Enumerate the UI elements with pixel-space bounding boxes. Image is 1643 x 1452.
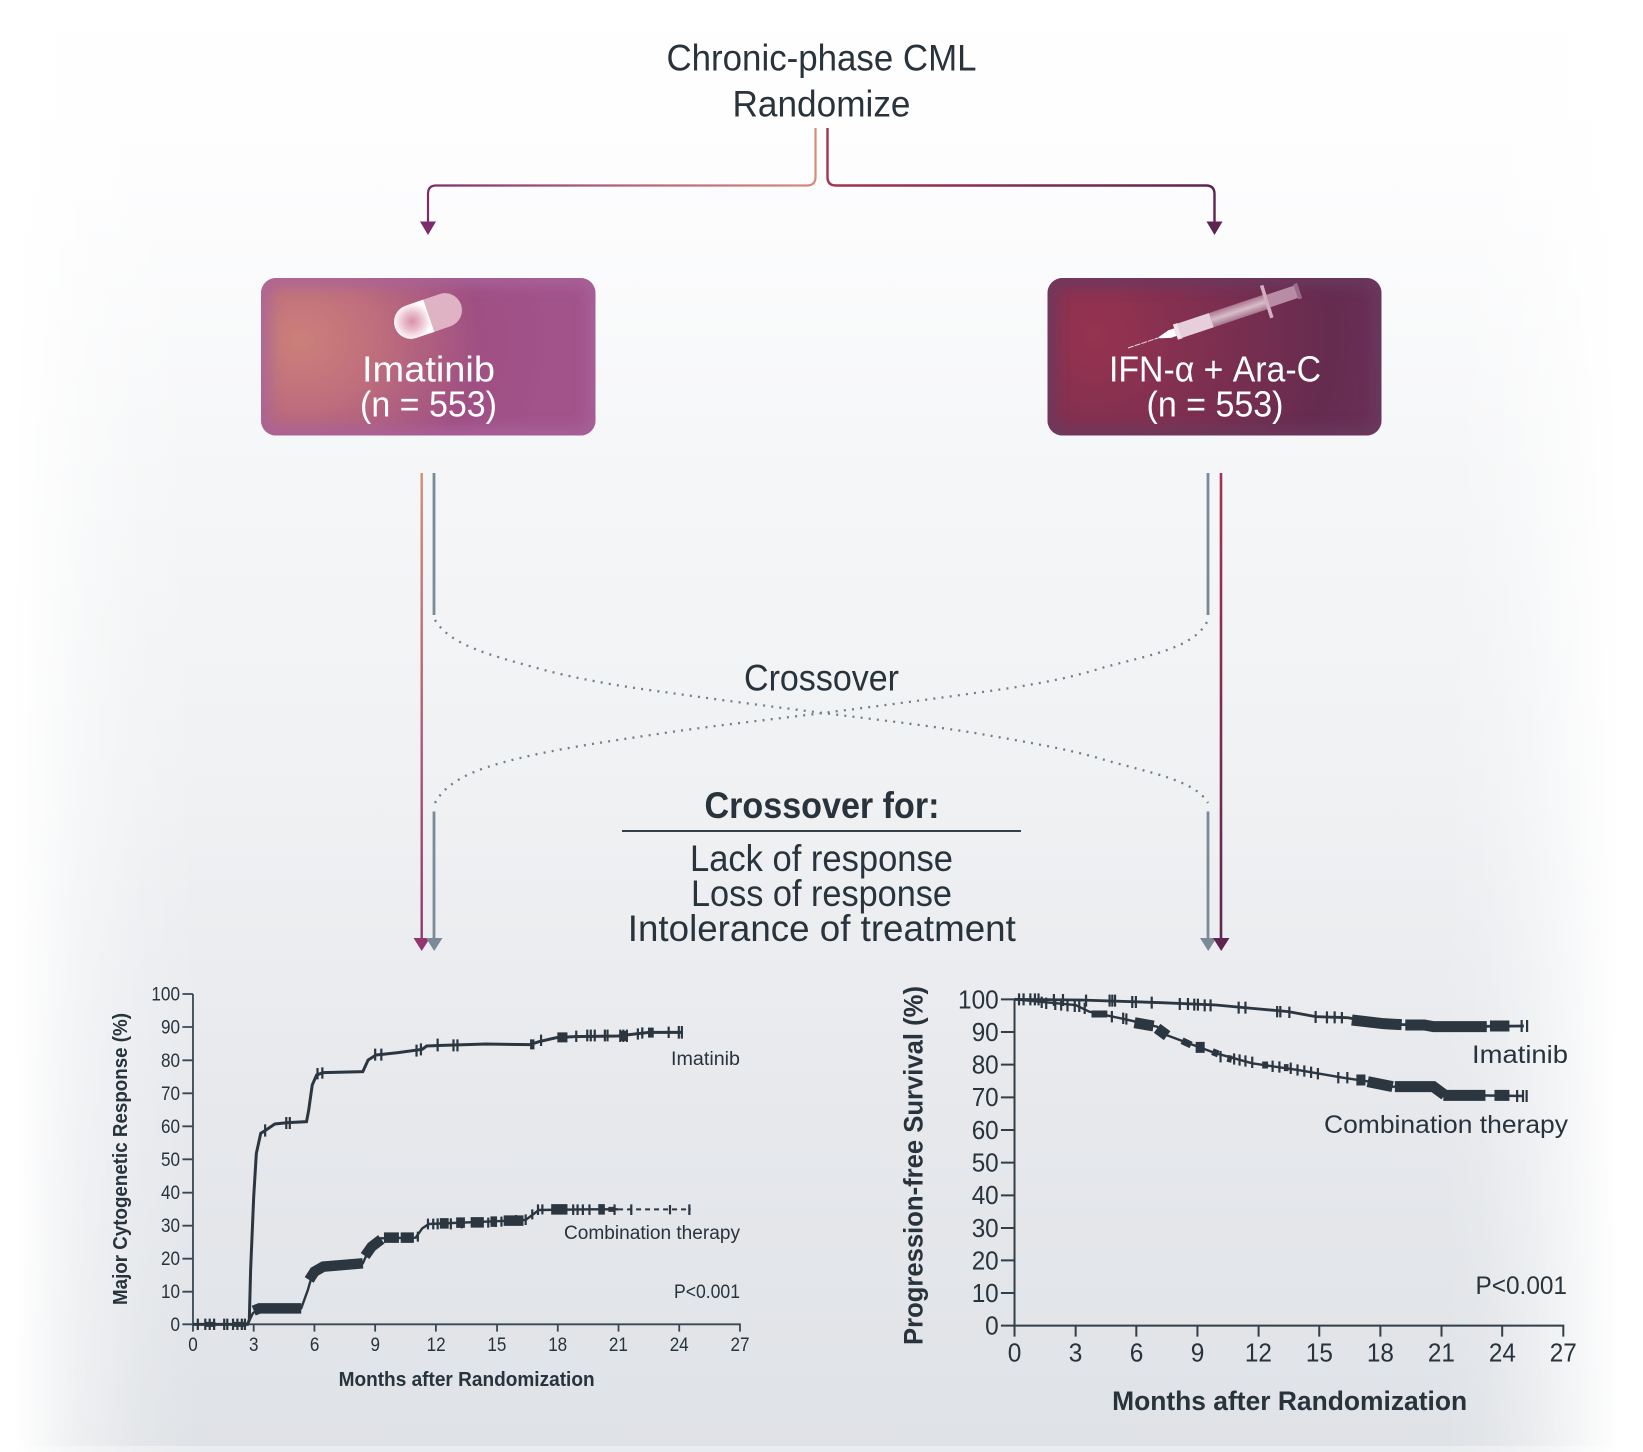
combination curve bbox=[1015, 997, 1527, 1102]
x axis labels: 3 bbox=[1069, 1338, 1082, 1368]
arrow: combination crossover line bbox=[1200, 473, 1216, 951]
y axis labels: 80 bbox=[972, 1050, 999, 1080]
x axis labels: 9 bbox=[1191, 1338, 1204, 1368]
label: imatinib: Imatinib bbox=[362, 349, 495, 390]
y axis labels: 80 bbox=[161, 1051, 180, 1072]
x axis labels: 12 bbox=[1245, 1338, 1272, 1368]
icon: capsule bbox=[389, 289, 467, 343]
label: IFN + Ara-C bbox=[1109, 349, 1321, 425]
label: IFN + Ara-C: (n = 553) bbox=[1146, 384, 1284, 425]
plot bbox=[182, 994, 740, 1332]
panel: IFN + Ara-C bbox=[1048, 274, 1382, 436]
label: imatinib bbox=[360, 349, 497, 425]
x axis labels: 27 bbox=[730, 1335, 750, 1356]
x axis labels: 15 bbox=[1306, 1338, 1333, 1368]
y axis labels: 30 bbox=[972, 1213, 999, 1243]
y axis labels: 40 bbox=[161, 1183, 180, 1204]
x axis labels: 21 bbox=[1428, 1338, 1455, 1368]
label: imatinib: Imatinib bbox=[671, 1049, 740, 1070]
y axis labels: 70 bbox=[972, 1082, 999, 1112]
plot bbox=[1001, 993, 1563, 1337]
text: crossover reasons: Intolerance of treatment bbox=[628, 908, 1017, 949]
x axis labels: 9 bbox=[371, 1335, 380, 1356]
arrow: randomize to imatinib bbox=[420, 128, 816, 235]
y axis labels bbox=[151, 984, 180, 1336]
y axis labels: 90 bbox=[161, 1018, 180, 1038]
y axis labels: 60 bbox=[972, 1115, 999, 1145]
x axis labels bbox=[188, 1335, 750, 1356]
arrow: imatinib crossover line bbox=[426, 473, 442, 951]
x axis labels: 21 bbox=[609, 1335, 628, 1356]
x axis labels: 27 bbox=[1550, 1338, 1577, 1368]
title: Randomize bbox=[732, 83, 910, 125]
panel: imatinib bbox=[261, 278, 596, 436]
y axis labels: 30 bbox=[161, 1216, 180, 1237]
y axis labels: 100 bbox=[958, 984, 999, 1014]
title: Chronic-phase CML bbox=[666, 37, 976, 79]
chart: major cytogenetic response bbox=[109, 984, 750, 1391]
label: IFN + Ara-C: IFN-α + Ara-C bbox=[1109, 349, 1321, 390]
title bbox=[666, 37, 976, 125]
x axis labels: 24 bbox=[670, 1335, 689, 1356]
x axis labels: 6 bbox=[1130, 1338, 1143, 1368]
label: imatinib: (n = 553) bbox=[360, 384, 497, 425]
label: crossover: Crossover bbox=[744, 658, 899, 699]
x axis labels: 15 bbox=[487, 1335, 506, 1356]
y axis labels bbox=[958, 984, 999, 1341]
x axis labels: 24 bbox=[1489, 1338, 1516, 1368]
chart: progression-free survival bbox=[899, 984, 1577, 1416]
y axis labels: 50 bbox=[972, 1148, 999, 1178]
x axis labels: 18 bbox=[548, 1335, 567, 1356]
y axis title: Major Cytogenetic Response (%) bbox=[109, 1013, 132, 1305]
heading: crossover for: Crossover for: bbox=[704, 785, 940, 826]
text: crossover reasons: Loss of response bbox=[691, 873, 952, 914]
icon: syringe bbox=[1123, 274, 1305, 364]
x axis labels: 0 bbox=[1008, 1338, 1021, 1368]
y axis labels: 40 bbox=[972, 1180, 999, 1210]
imatinib curve bbox=[193, 1026, 682, 1324]
y axis labels: 20 bbox=[972, 1245, 999, 1275]
y axis labels: 0 bbox=[985, 1311, 999, 1341]
x axis labels: 3 bbox=[249, 1335, 259, 1356]
label: p value: P<0.001 bbox=[674, 1282, 740, 1303]
x axis title: Months after Randomization bbox=[1112, 1386, 1467, 1416]
combination curve bbox=[198, 1204, 691, 1330]
arrow: randomize to IFN + Ara-C bbox=[828, 128, 1222, 235]
x axis labels bbox=[1008, 1338, 1577, 1368]
label: p value: P<0.001 bbox=[1476, 1272, 1567, 1300]
label: combination therapy: Combination therapy bbox=[564, 1223, 740, 1244]
y axis labels: 100 bbox=[151, 984, 180, 1006]
y axis labels: 90 bbox=[972, 1017, 999, 1047]
y axis labels: 20 bbox=[161, 1249, 180, 1270]
y axis title: Progression-free Survival (%) bbox=[899, 986, 929, 1345]
label: imatinib: Imatinib bbox=[1472, 1041, 1568, 1069]
x axis title: Months after Randomization bbox=[339, 1368, 595, 1391]
arrow: combination main line bbox=[1213, 473, 1230, 951]
arrow: imatinib main line bbox=[414, 473, 430, 951]
text: crossover reasons: Lack of response bbox=[690, 838, 953, 879]
label: combination therapy: Combination therapy bbox=[1324, 1111, 1569, 1139]
x axis labels: 18 bbox=[1367, 1338, 1394, 1368]
y axis labels: 60 bbox=[161, 1117, 180, 1138]
imatinib curve bbox=[1015, 993, 1527, 1032]
y axis labels: 70 bbox=[161, 1084, 180, 1105]
x axis labels: 0 bbox=[188, 1335, 198, 1356]
y axis labels: 10 bbox=[161, 1282, 180, 1303]
y axis labels: 50 bbox=[161, 1150, 180, 1171]
y axis labels: 0 bbox=[170, 1315, 180, 1336]
text: crossover reasons bbox=[628, 838, 1017, 949]
x axis labels: 6 bbox=[310, 1335, 319, 1356]
crossover dotted curves bbox=[435, 620, 1208, 803]
x axis labels: 12 bbox=[427, 1335, 446, 1356]
y axis labels: 10 bbox=[972, 1278, 999, 1308]
